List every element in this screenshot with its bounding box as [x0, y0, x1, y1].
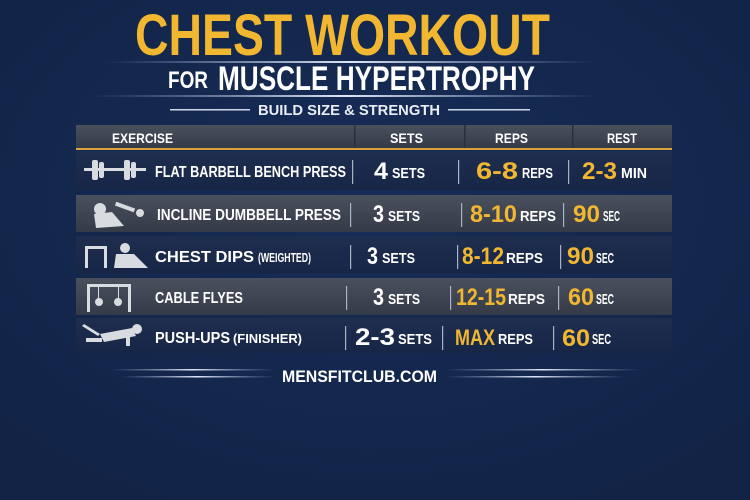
row: chest dips: 3	[367, 243, 378, 270]
row: bench press: 4	[374, 158, 389, 185]
table header: REST	[607, 130, 637, 146]
row: push-ups: 2-3	[355, 324, 395, 351]
table header: REPS	[495, 130, 528, 146]
row: cable flyes: 12-15	[456, 284, 506, 311]
row: push-ups: 60	[562, 325, 590, 352]
row: cable flyes: 3	[373, 284, 384, 311]
table header: EXERCISE	[112, 130, 173, 146]
row: push-ups: (FINISHER)	[233, 331, 302, 346]
row: incline dumbbell	[76, 195, 672, 232]
row: incline dumbbell: SETS	[388, 208, 420, 225]
table header	[76, 125, 672, 150]
subtitle: MUSCLE HYPERTROPHY	[218, 60, 535, 98]
subtitle	[168, 60, 535, 98]
row: push-ups: PUSH-UPS	[155, 330, 230, 347]
row: push-ups: REPS	[498, 331, 533, 348]
row: cable flyes: REPS	[508, 291, 545, 308]
row: bench press	[76, 151, 672, 190]
row: chest dips: CHEST DIPS	[155, 249, 254, 266]
row: push-ups: SETS	[398, 331, 432, 348]
row: bench press: 2-3	[582, 158, 617, 185]
row: bench press: FLAT BARBELL BENCH PRESS	[155, 164, 346, 181]
icon: dips	[85, 243, 148, 268]
icon: push-up	[82, 324, 142, 346]
row: incline dumbbell: 8-10	[470, 201, 517, 228]
row: incline dumbbell: REPS	[520, 208, 556, 225]
row: bench press: SETS	[392, 165, 425, 182]
row: chest dips: SETS	[382, 250, 415, 267]
row: cable flyes: CABLE FLYES	[155, 290, 243, 307]
icon: cable machine	[87, 284, 131, 312]
footer: MENSFITCLUB.COM	[282, 367, 437, 386]
row: bench press: REPS	[522, 165, 553, 182]
row: incline dumbbell: SEC	[603, 208, 620, 225]
title: CHEST WORKOUT	[135, 3, 550, 68]
row: push-ups	[76, 318, 672, 353]
icon: barbell	[84, 160, 146, 180]
table	[76, 125, 672, 353]
row: chest dips: SEC	[596, 250, 614, 267]
row: cable flyes: 60	[568, 284, 594, 311]
row: push-ups: MAX	[455, 325, 495, 350]
row: chest dips: 90	[567, 243, 594, 270]
tagline: BUILD SIZE & STRENGTH	[258, 102, 440, 119]
row: bench press: MIN	[621, 165, 647, 182]
row: cable flyes: SETS	[388, 291, 420, 308]
row: chest dips	[76, 236, 672, 273]
subtitle: FOR	[168, 67, 208, 94]
row: chest dips: (WEIGHTED)	[258, 250, 311, 265]
row: incline dumbbell: INCLINE DUMBBELL PRESS	[157, 207, 341, 224]
row: bench press: 6-8	[476, 158, 518, 185]
row: chest dips: 8-12	[462, 243, 504, 270]
row: incline dumbbell: 90	[573, 201, 600, 228]
row: cable flyes	[76, 278, 672, 315]
row: push-ups: SEC	[592, 331, 611, 348]
row: incline dumbbell: 3	[373, 201, 384, 228]
row: cable flyes: SEC	[596, 291, 614, 308]
table header: SETS	[390, 130, 423, 146]
row: chest dips: REPS	[506, 250, 543, 267]
icon: incline press	[94, 202, 144, 228]
